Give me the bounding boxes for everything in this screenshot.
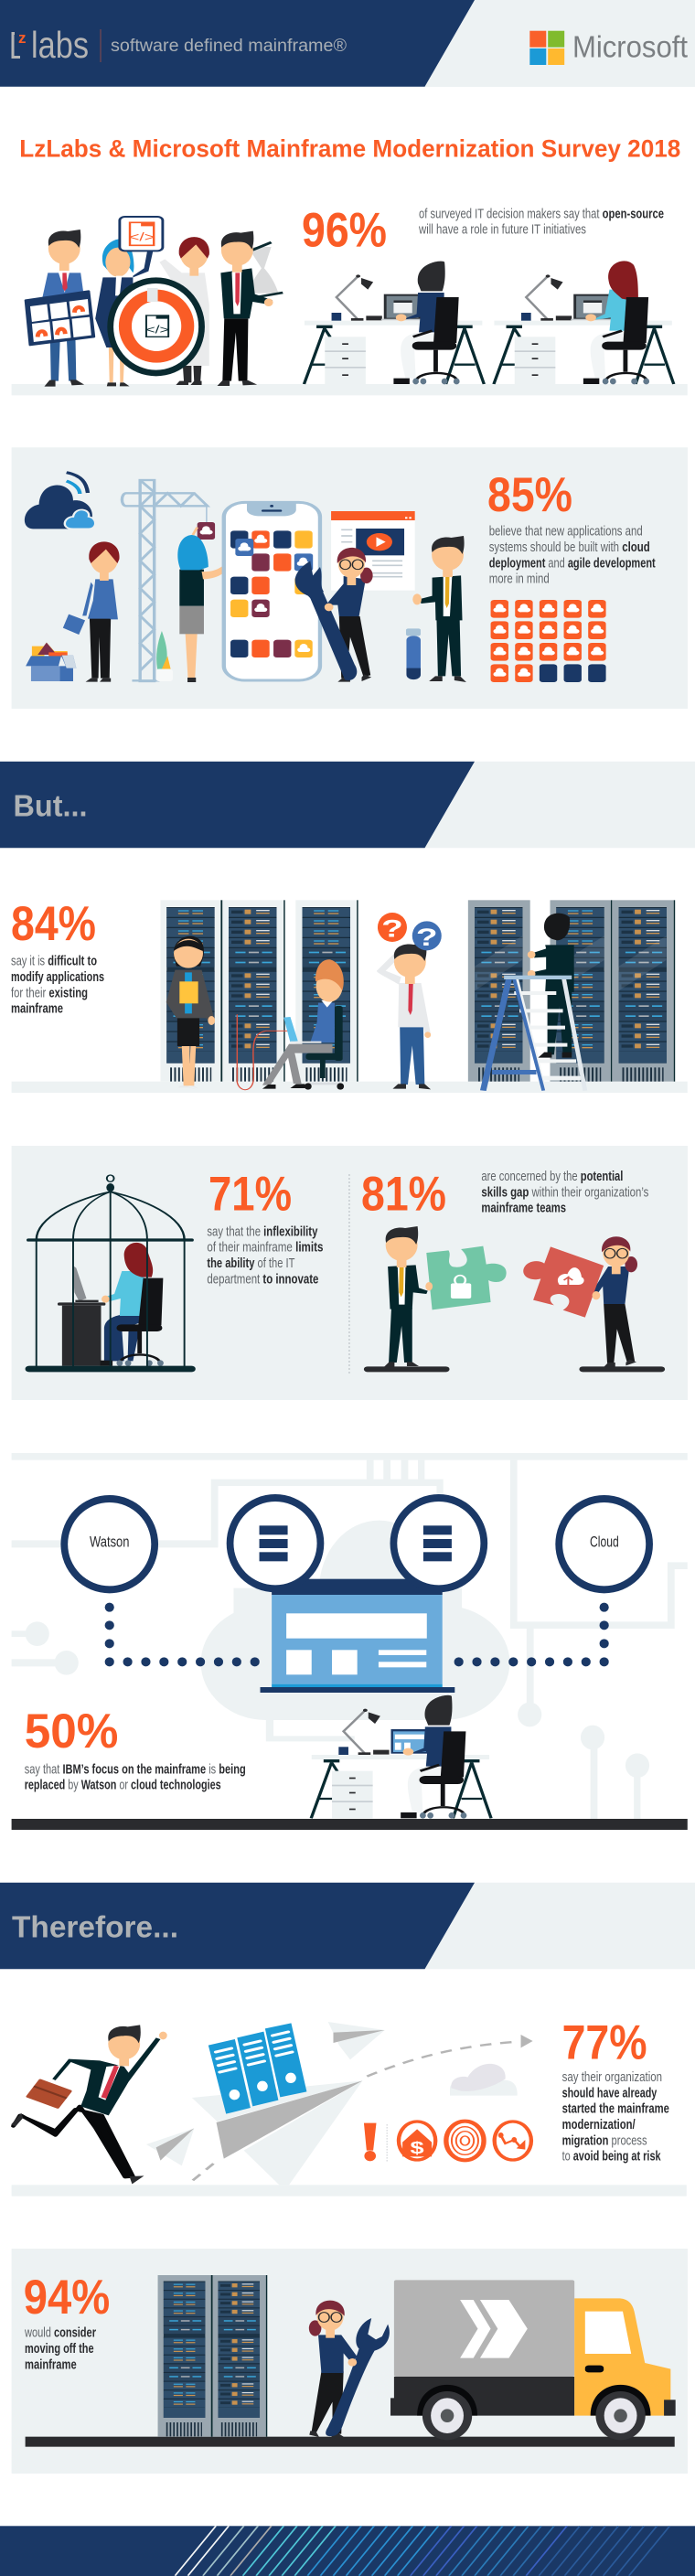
text: new applications: believe that new applications and xyxy=(489,524,643,540)
planes xyxy=(146,2022,385,2185)
waffle chart: 85 percent xyxy=(491,600,606,682)
stat 94%: 94% xyxy=(24,2271,110,2325)
text: skills gap: skills gap within their organization’s xyxy=(481,1184,648,1200)
mainframe diagram illustration xyxy=(12,1453,688,1830)
person: woman with blue hair xyxy=(95,239,153,386)
person: woman with folder xyxy=(166,936,215,1090)
person: seated woman with laptop xyxy=(262,959,344,1090)
text: replaced: replaced by Watson or cloud technologies xyxy=(25,1778,221,1793)
person: woman with blue hair at phone xyxy=(177,528,238,682)
text: migration: migration process xyxy=(562,2132,647,2148)
text: the ability: the ability of the IT xyxy=(207,1256,294,1271)
text: difficult: say it is difficult to xyxy=(11,954,97,969)
heading: Therefore: Therefore... xyxy=(12,1909,178,1943)
text: say their organization: say their organization xyxy=(562,2069,662,2085)
text: moving off: moving off the xyxy=(25,2341,94,2357)
text: more in mind: more in mind xyxy=(489,572,550,587)
paper plane illustration xyxy=(11,2022,687,2197)
circle: server 1 xyxy=(227,1494,324,1592)
arrowhead xyxy=(521,2035,533,2047)
running businessman xyxy=(11,2025,167,2184)
server room illustration xyxy=(12,900,688,1093)
dark server racks xyxy=(468,900,675,1082)
team and desks illustration xyxy=(12,217,688,395)
plant xyxy=(156,631,173,681)
dashed flight path xyxy=(193,2042,519,2180)
video window xyxy=(331,511,415,591)
header banner xyxy=(0,0,695,87)
desk with developer xyxy=(311,1695,491,1819)
label: Watson: Watson xyxy=(90,1534,130,1551)
man with green puzzle piece xyxy=(364,1226,507,1372)
text: future initiatives: will have a role in future IT initiatives xyxy=(418,222,586,238)
LzLabs logo: labs xyxy=(31,24,89,66)
delivery truck xyxy=(390,2280,676,2440)
circle: server 2 xyxy=(390,1494,487,1592)
text: limits: of their mainframe limits xyxy=(207,1240,323,1256)
icon: cost: $ xyxy=(411,2138,424,2157)
birdcage xyxy=(26,1175,196,1372)
text: inflexibility: say that the inflexibility xyxy=(207,1224,318,1239)
header blue band xyxy=(0,0,475,87)
phone with app tiles xyxy=(224,502,320,680)
person: man in dark suit with hourglass xyxy=(218,231,283,386)
text: deployment: deployment and agile development xyxy=(489,555,656,571)
person: woman in white shirt xyxy=(159,237,209,385)
stat 71%: 71% xyxy=(208,1167,292,1221)
LzLabs logo: software defined mainframe® xyxy=(111,37,347,56)
heading: But: But... xyxy=(13,788,88,822)
person: man with calendar board xyxy=(26,230,94,387)
text: existing: for their existing xyxy=(11,985,88,1000)
circle: Cloud xyxy=(555,1495,653,1593)
section: 77% should have started xyxy=(11,2015,687,2197)
stat 85%: 85% xyxy=(487,468,572,522)
server racks xyxy=(158,2275,267,2437)
text: risk: to avoid being at risk xyxy=(562,2149,661,2164)
circle: Watson xyxy=(60,1495,158,1593)
text: open-source: of surveyed IT decision makers say that open-source xyxy=(419,207,664,222)
crane xyxy=(122,480,208,681)
ground bar xyxy=(12,1819,688,1830)
text: cloud: systems should be built with cloud xyxy=(489,540,650,555)
desk with male developer xyxy=(305,262,484,384)
icon: open box xyxy=(26,643,76,681)
desk with female developer xyxy=(494,261,674,384)
ground bar xyxy=(26,2437,675,2447)
text: IBM focus: say that IBM’s focus on the mainframe is being xyxy=(25,1761,246,1777)
Microsoft logo: Microsoft xyxy=(572,30,688,64)
text: would consider: would consider xyxy=(24,2325,96,2341)
stat 77%: 77% xyxy=(562,2015,647,2069)
footer band with diagonal lines xyxy=(0,2526,695,2576)
light server racks xyxy=(160,900,358,1082)
text: mainframe: mainframe xyxy=(25,2357,77,2372)
cloud xyxy=(450,2064,518,2096)
text: potential: are concerned by the potential xyxy=(481,1169,623,1184)
panel: 71% and 81% xyxy=(12,1146,688,1400)
icon: code window xyxy=(120,217,163,251)
icon: declining chart xyxy=(493,2120,533,2162)
person: woman with folder xyxy=(63,541,120,682)
stat 84%: 84% xyxy=(11,897,96,951)
icon: warning xyxy=(364,2123,377,2161)
panel: 94% moving off xyxy=(12,2249,688,2474)
Microsoft logo xyxy=(529,30,688,65)
stat 96%: 96% xyxy=(302,203,387,257)
question mark orange xyxy=(378,913,407,943)
person: man in suit xyxy=(412,536,466,682)
truck and racks illustration xyxy=(26,2275,676,2447)
tile: hanging cloud xyxy=(198,522,215,540)
title: LzLabs & Microsoft Mainframe Modernization Survey 2018 xyxy=(19,134,680,162)
LzLabs logo xyxy=(13,24,347,66)
question mark blue xyxy=(412,921,442,951)
icon: cloud with wifi xyxy=(25,473,95,529)
stat 50%: 50% xyxy=(25,1705,118,1758)
red network cable xyxy=(237,1014,288,1090)
mainframe window xyxy=(261,1579,454,1693)
icon: code window: </> xyxy=(129,230,155,244)
panel: 85% cloud deployment xyxy=(12,447,688,709)
stat 81%: 81% xyxy=(361,1167,446,1221)
person at desk in cage xyxy=(58,1243,164,1366)
cage and puzzle illustration xyxy=(26,1174,665,1374)
man on ladder xyxy=(528,914,574,1058)
ladder xyxy=(483,976,585,1091)
banner: But xyxy=(0,762,695,848)
text: mainframe teams: mainframe teams xyxy=(481,1201,566,1216)
person: confused man xyxy=(377,943,431,1089)
text: modify: modify applications xyxy=(11,969,104,985)
woman with red puzzle piece xyxy=(523,1236,665,1372)
text: to innovate: department to innovate xyxy=(207,1271,318,1287)
cloud apps illustration xyxy=(25,473,606,682)
dotted connectors xyxy=(105,1603,609,1666)
icon: cost xyxy=(397,2120,437,2162)
section: 96% open-source xyxy=(12,203,688,395)
person: woman with wrench xyxy=(295,548,373,682)
LzLabs logo: z xyxy=(18,29,26,47)
question mark orange: ? xyxy=(381,915,403,943)
text: mainframe: mainframe xyxy=(11,1001,63,1017)
person: woman with wrench xyxy=(309,2301,390,2437)
target ring icon xyxy=(107,277,205,376)
dotted divider xyxy=(348,1174,350,1374)
bottle xyxy=(406,628,421,679)
text: should have: should have already xyxy=(562,2085,658,2100)
text: modernization: modernization/ xyxy=(562,2117,636,2132)
label: Cloud: Cloud xyxy=(590,1534,619,1551)
section: 84% difficult to modify xyxy=(11,897,688,1093)
icon: target xyxy=(444,2120,486,2162)
section: 50% Watson or cloud xyxy=(12,1453,688,1830)
question mark blue: ? xyxy=(416,925,438,951)
binders xyxy=(208,2023,306,2114)
banner: Therefore xyxy=(0,1883,695,1969)
target ring icon: </> xyxy=(145,324,169,337)
